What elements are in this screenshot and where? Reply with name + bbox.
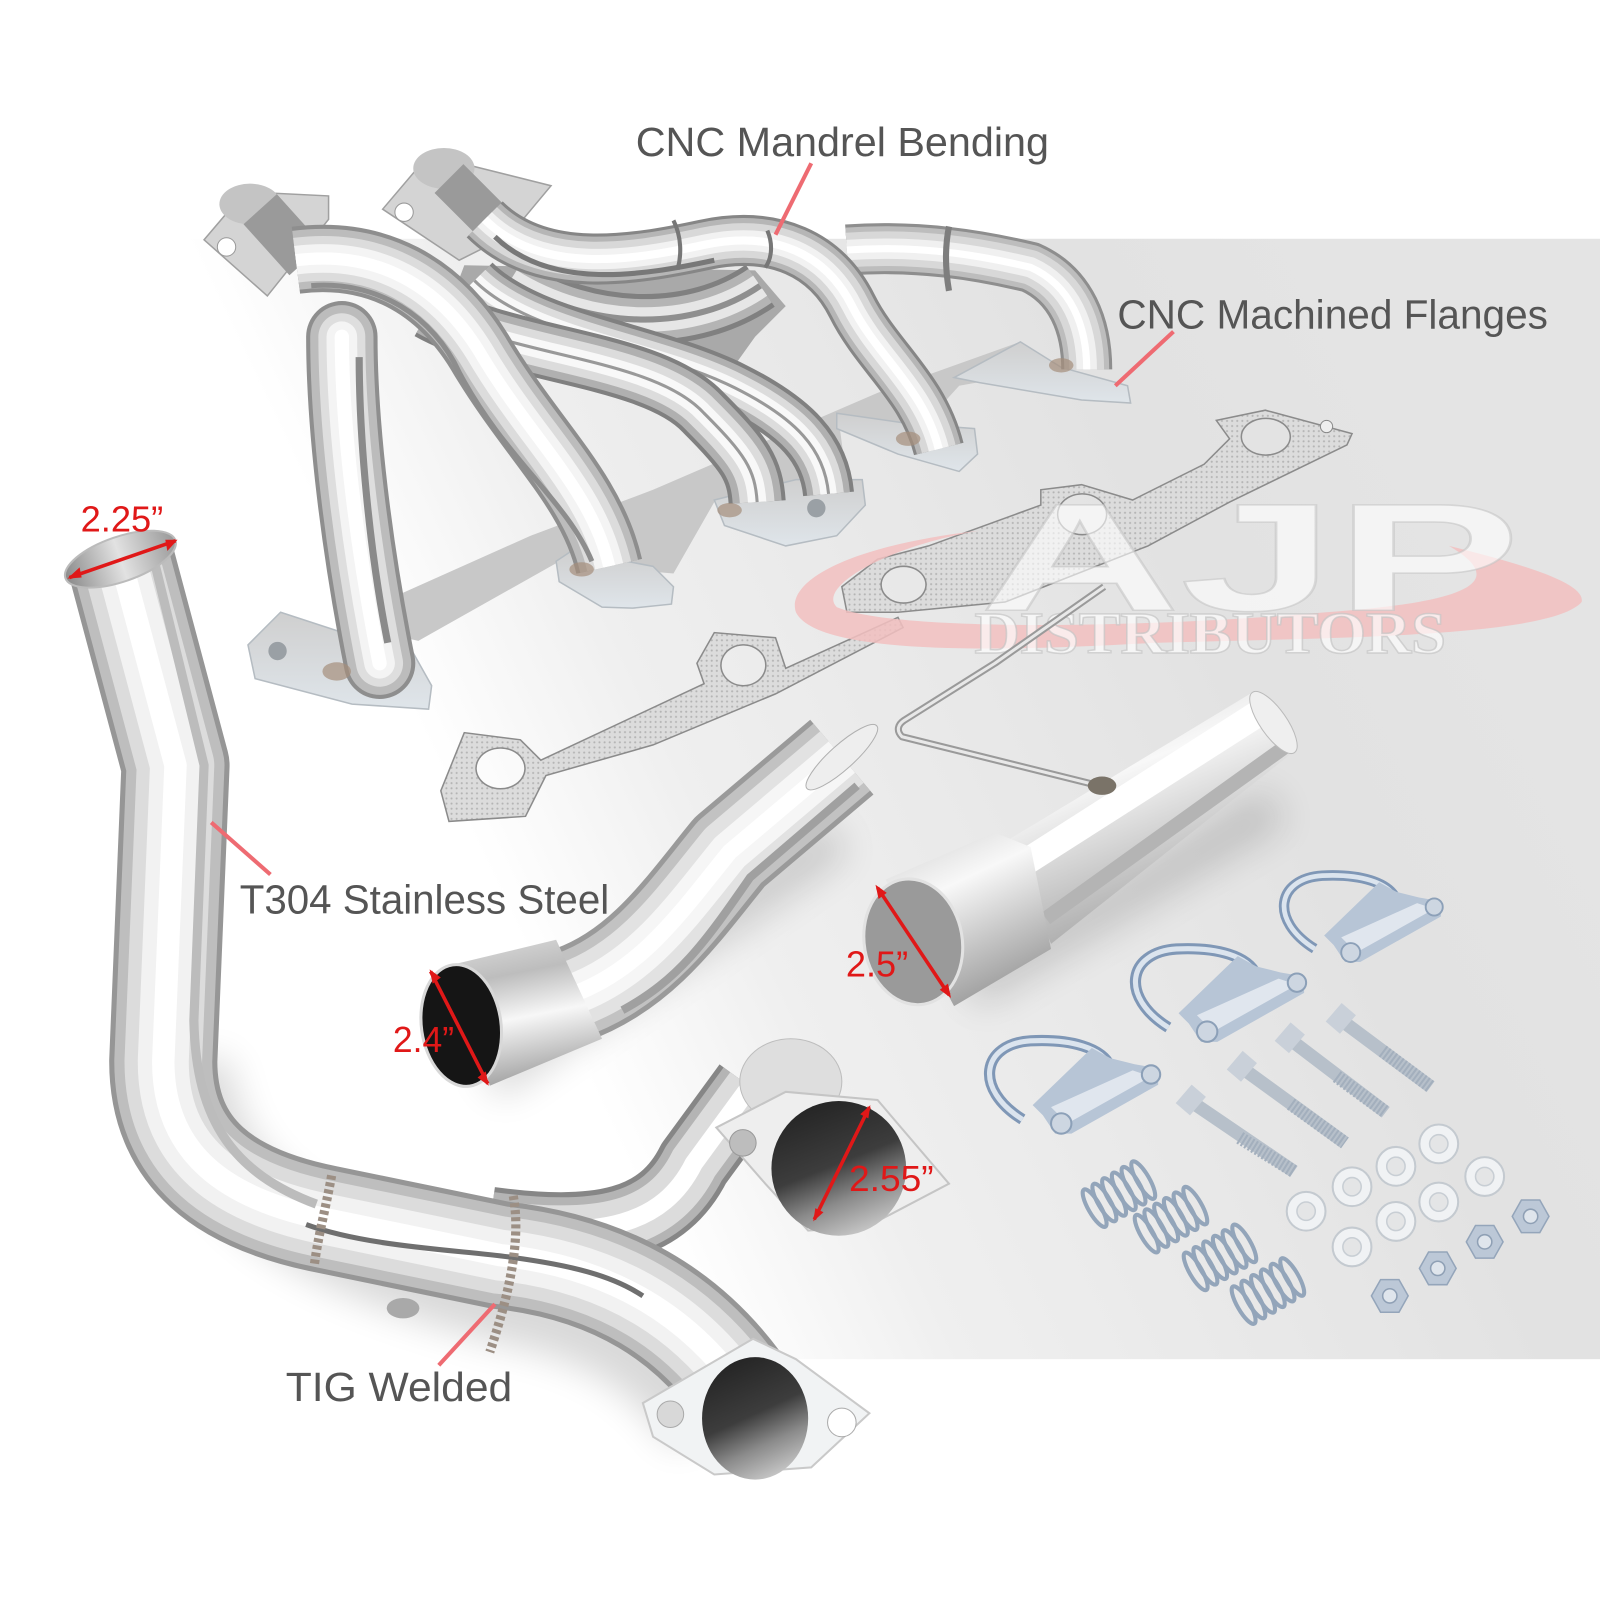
bracket rod bbox=[898, 587, 1107, 788]
right flange bbox=[383, 148, 551, 260]
dimension 2.4: 2.4” bbox=[393, 1020, 454, 1060]
outer left runner bbox=[296, 258, 609, 566]
label: CNC Machined Flanges: CNC Machined Flanges bbox=[1117, 292, 1548, 338]
left flange bbox=[204, 184, 329, 296]
flange rail bbox=[337, 342, 1061, 641]
dimension 2.55: 2.55” bbox=[849, 1159, 934, 1199]
welds bbox=[322, 358, 1073, 681]
gasket bbox=[441, 410, 1352, 821]
logo subtitle: DISTRIBUTORS bbox=[974, 600, 1446, 666]
inner runner one bbox=[474, 281, 829, 494]
dimension 2.5: 2.5” bbox=[846, 945, 908, 985]
straight front runner bbox=[342, 337, 388, 663]
washers bbox=[1287, 1124, 1504, 1266]
label: TIG Welded: TIG Welded bbox=[286, 1364, 512, 1410]
hardware bbox=[990, 875, 1549, 1327]
drop shadows bbox=[194, 806, 1276, 1429]
nuts bbox=[1371, 1200, 1549, 1312]
back runner bbox=[847, 227, 1087, 369]
weld beads bbox=[314, 1176, 516, 1352]
upper runner bbox=[485, 219, 939, 449]
springs bbox=[1079, 1158, 1308, 1327]
callout leader lines bbox=[211, 163, 1173, 1365]
down pipe bbox=[58, 519, 949, 1480]
logo watermark bbox=[795, 472, 1582, 666]
bung bbox=[387, 1298, 419, 1318]
bolts bbox=[1184, 1012, 1431, 1171]
connector pipe 2.4 bbox=[413, 717, 885, 1092]
logo letters: AJP bbox=[980, 472, 1520, 643]
lower flange bbox=[643, 1339, 869, 1480]
connector pipe 2.5 bbox=[854, 685, 1305, 1013]
label: T304 Stainless Steel: T304 Stainless Steel bbox=[240, 876, 609, 922]
dimension 2.25: 2.25” bbox=[81, 500, 163, 540]
main tube bbox=[120, 556, 750, 1403]
header assembly bbox=[204, 148, 1131, 709]
exhaust clamps bbox=[990, 875, 1443, 1134]
logo swoosh bbox=[795, 531, 1582, 649]
mouth bbox=[58, 519, 183, 599]
inner runner two bbox=[429, 311, 757, 502]
label: CNC Mandrel Bending: CNC Mandrel Bending bbox=[636, 119, 1049, 165]
manifold mass bbox=[449, 265, 786, 408]
branch bbox=[490, 1087, 750, 1230]
dimension arrows bbox=[67, 540, 951, 1221]
upper flange bbox=[716, 1039, 949, 1236]
middle lower runner bbox=[510, 281, 760, 320]
flange pads bbox=[248, 342, 1131, 709]
